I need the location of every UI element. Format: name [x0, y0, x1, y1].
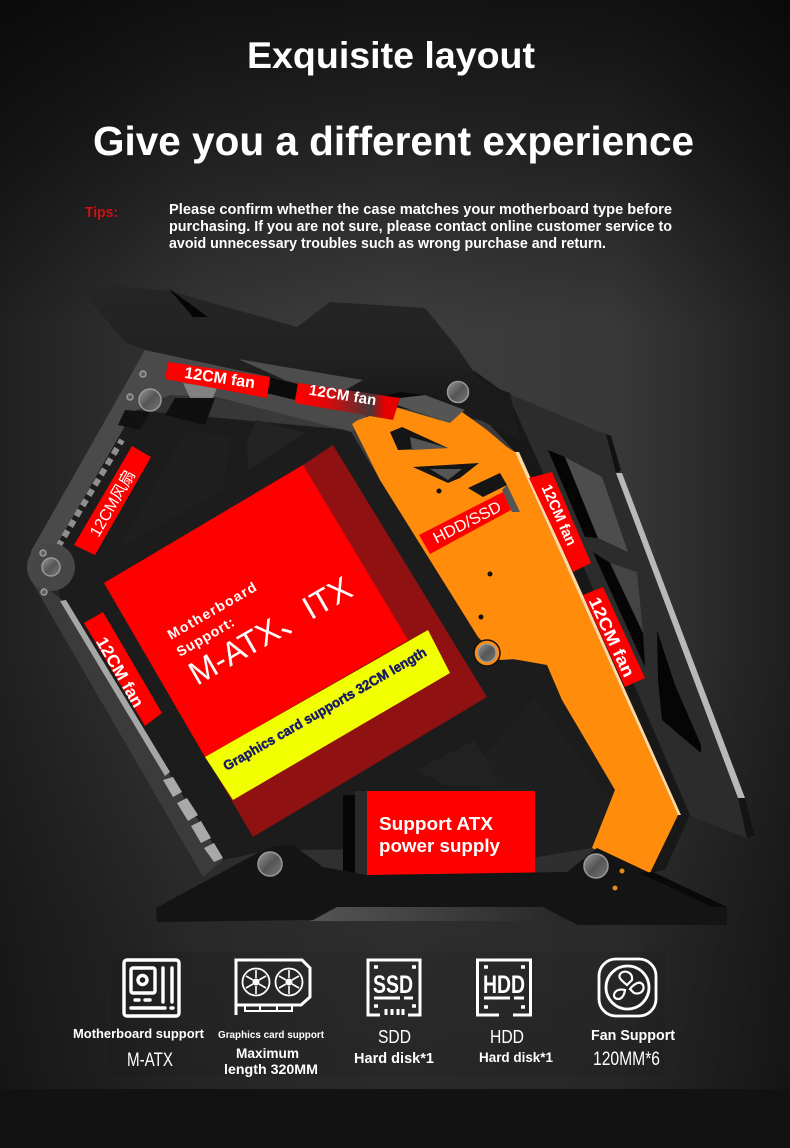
spec: HDD: HDD	[490, 1027, 524, 1047]
spec: graphics card: Graphics card support	[218, 1029, 324, 1041]
icon: graphics card	[236, 960, 310, 1015]
tips label: Tips:	[85, 204, 118, 221]
tips text: Please confirm whether the case matches your motherboard type before	[169, 202, 672, 218]
label: 12CM fan top middle: 12CM fan	[308, 382, 378, 409]
spec: motherboard	[73, 960, 205, 1071]
spec: graphics card: Maximum	[236, 1046, 299, 1061]
spec: graphics card	[218, 960, 324, 1077]
spec: HDD	[478, 960, 553, 1065]
power supply bay: Support ATX	[379, 814, 493, 834]
spec: graphics card: length 320MM	[224, 1062, 318, 1077]
interior black panel	[55, 410, 615, 860]
label: HDD/SSD: HDD/SSD	[431, 499, 504, 547]
tips text: avoid unnecessary troubles such as wrong purchase and return.	[169, 236, 606, 252]
spec: SSD: SDD	[378, 1027, 411, 1047]
icon: HDD: HDD	[483, 971, 525, 999]
label: 12CM fan left upper	[74, 446, 151, 555]
icon: fan	[599, 959, 656, 1016]
spec: motherboard: Motherboard support	[73, 1027, 205, 1041]
label: 12CM fan top left: 12CM fan	[183, 365, 256, 392]
graphics card label	[205, 630, 450, 800]
label: 12CM fan left lower	[84, 612, 162, 726]
right side panel	[505, 392, 755, 870]
spec: fan: 120MM*6	[593, 1049, 660, 1070]
tips text	[169, 202, 672, 252]
grey frame	[27, 350, 465, 877]
label: HDD/SSD	[419, 492, 511, 554]
label: 12CM fan left upper: 12CM风扇	[86, 467, 139, 540]
motherboard support label: M-ATX、ITX	[182, 569, 358, 692]
screws	[40, 371, 608, 878]
icon: motherboard	[124, 960, 179, 1016]
top wing panel	[73, 281, 520, 440]
title: Exquisite layout	[247, 35, 535, 76]
motherboard support label: Motherboard	[164, 579, 259, 643]
label: 12CM fan top left	[165, 362, 270, 398]
orange drive bay	[352, 407, 681, 873]
spec: SSD	[354, 960, 434, 1067]
label: 12CM fan right upper: 12CM fan	[538, 482, 580, 548]
icon: SSD: SSD	[373, 971, 413, 999]
spec: SSD: Hard disk*1	[354, 1051, 434, 1067]
motherboard support label: Support:	[174, 614, 237, 660]
label: 12CM fan top middle	[295, 382, 400, 420]
graphics card label: Graphics card supports 32CM length	[221, 645, 429, 774]
label: 12CM fan right lower	[583, 587, 645, 687]
spec: HDD: Hard disk*1	[479, 1050, 553, 1065]
label: 12CM fan left lower: 12CM fan	[92, 634, 147, 711]
label: 12CM fan right lower: 12CM fan	[585, 594, 638, 680]
power supply bay: power supply	[379, 836, 500, 856]
base stand	[156, 845, 727, 925]
power supply bay	[343, 791, 535, 876]
spec strip	[73, 952, 675, 1077]
spec: fan: Fan Support	[591, 1027, 675, 1044]
label: 12CM fan right upper	[529, 472, 591, 572]
tips text: purchasing. If you are not sure, please contact online customer service to	[169, 219, 672, 235]
spec: motherboard: M-ATX	[127, 1049, 173, 1071]
computer case	[27, 281, 755, 925]
motherboard area	[104, 445, 487, 837]
spec: fan	[591, 959, 675, 1070]
subtitle: Give you a different experience	[93, 118, 694, 164]
black band beside drive bay	[473, 370, 690, 873]
